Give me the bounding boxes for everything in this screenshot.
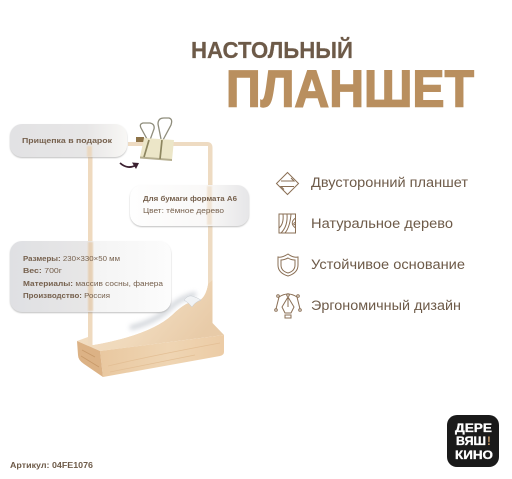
- callout: gift clip: Прищепка в подарок: [22, 136, 112, 145]
- callout: specifications: [10, 241, 171, 312]
- icon: wood rings: [279, 214, 296, 233]
- feature: ergonomic design: [275, 294, 461, 318]
- title: large heading: ПЛАНШЕТ: [226, 60, 474, 118]
- wooden base front and end: [77, 335, 224, 377]
- callout: gift clip: [10, 124, 127, 157]
- logo: brand badge: КИНО: [455, 450, 493, 462]
- feature: stable base: Устойчивое основание: [311, 257, 465, 272]
- post seen through the panel: [88, 242, 93, 311]
- spec: weight: Вес: 700г: [23, 266, 62, 275]
- post seen through the panel: [87, 146, 92, 157]
- paper sheet with curled corner: [92, 146, 208, 345]
- spec: origin: Производство: Россия: [23, 291, 110, 300]
- icon: diamond with arrows: [276, 172, 298, 194]
- spec: materials: Материалы: массив сосны, фанера: [23, 279, 164, 288]
- post seen through the panel: [207, 186, 212, 225]
- icon: pen tool: [275, 294, 301, 318]
- stand frame: [88, 142, 212, 348]
- wooden base top and curled wood: [77, 280, 224, 351]
- product illustration: wooden tablet stand: [77, 118, 224, 377]
- callout: paper format: [130, 185, 249, 226]
- feature: two-sided: [276, 172, 468, 194]
- binder clip: [136, 118, 174, 161]
- feature: natural wood: Натуральное дерево: [311, 216, 453, 231]
- spec: dimensions: Размеры: 230×330×50 мм: [23, 254, 120, 263]
- feature: two-sided: Двусторонний планшет: [311, 175, 468, 190]
- logo: brand badge: ДЕРЕ: [455, 423, 492, 435]
- callout: paper format: Для бумаги формата А6: [143, 194, 237, 203]
- logo: brand badge: !: [487, 436, 491, 448]
- article number: Артикул: 04FE1076: [10, 460, 93, 470]
- icon: shield: [278, 254, 298, 276]
- feature: ergonomic design: Эргономичный дизайн: [311, 298, 461, 313]
- logo: brand badge: [447, 415, 499, 467]
- feature: natural wood: [279, 214, 453, 233]
- title: small heading: НАСТОЛЬНЫЙ: [191, 36, 353, 63]
- callout: paper format: Цвет: тёмное дерево: [143, 206, 224, 215]
- feature: stable base: [278, 254, 465, 276]
- logo: brand badge: ВЯШ: [456, 436, 486, 448]
- arrow: points to clip: [120, 163, 136, 167]
